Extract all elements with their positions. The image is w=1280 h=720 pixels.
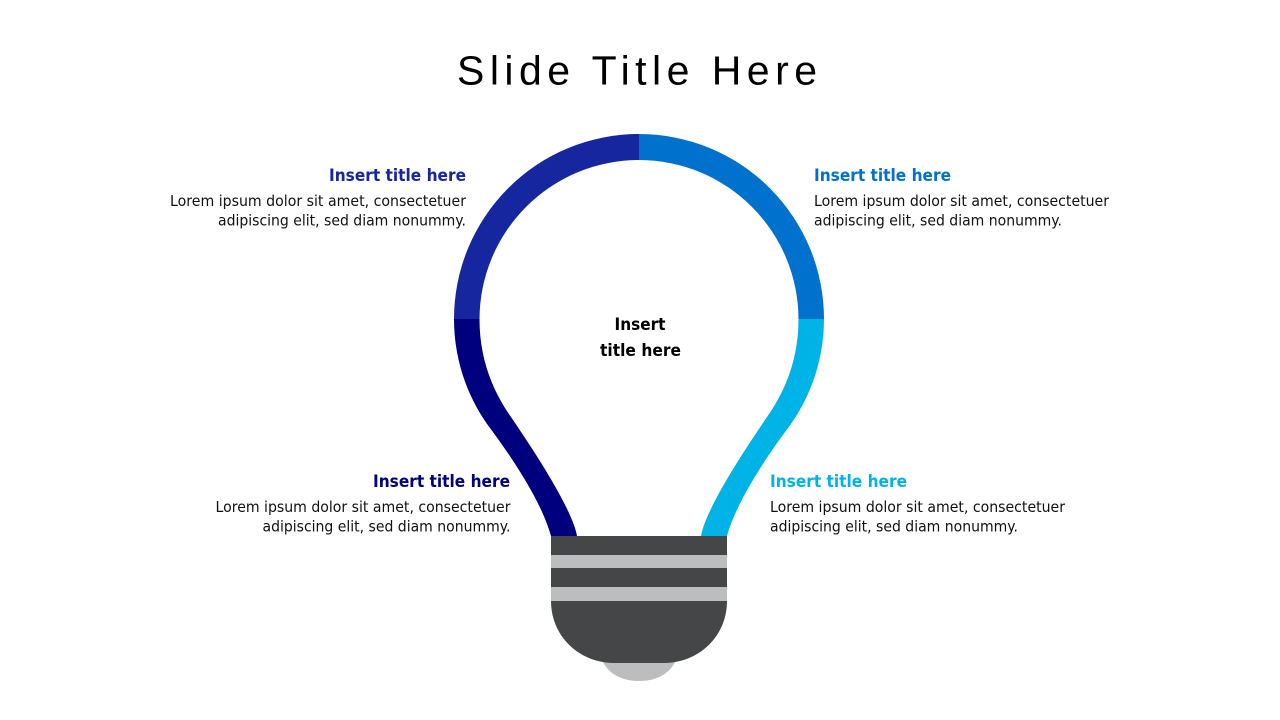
title: Slide Title Here (457, 48, 817, 94)
bulb segment: bottom right (701, 319, 824, 536)
center title: title here (600, 341, 681, 360)
text block: top left: Lorem ipsum dolor sit amet, consectetuer (170, 192, 467, 210)
bulb base (551, 536, 727, 663)
bulb segment: bottom left (454, 319, 577, 536)
center title (600, 315, 681, 360)
text block: top left: adipiscing elit, sed diam nonummy. (218, 212, 466, 230)
text block: top right: Insert title here (814, 166, 951, 185)
text block: top right: adipiscing elit, sed diam nonummy. (814, 212, 1062, 230)
text block: bottom left: adipiscing elit, sed diam nonummy. (262, 518, 510, 536)
text block: bottom right: adipiscing elit, sed diam nonummy. (770, 518, 1018, 536)
bulb segment: top right (639, 134, 824, 320)
text block: bottom left (216, 472, 511, 536)
center title: Insert (614, 315, 666, 334)
text block: bottom left: Lorem ipsum dolor sit amet, consectetuer (216, 498, 511, 516)
text block: bottom right (770, 472, 1066, 536)
text block: bottom right: Lorem ipsum dolor sit amet, consectetuer (770, 498, 1066, 516)
lightbulb icon (454, 134, 824, 681)
text block: bottom left: Insert title here (373, 472, 510, 491)
base stripe 1 (551, 555, 727, 568)
text block: top left (170, 166, 467, 230)
bulb tip (602, 660, 676, 681)
text block: top left: Insert title here (329, 166, 466, 185)
text block: bottom right: Insert title here (770, 472, 907, 491)
base stripe 2 (551, 587, 727, 601)
bulb segment: top left (454, 134, 639, 320)
text block: top right: Lorem ipsum dolor sit amet, consectetuer (814, 192, 1110, 210)
text block: top right (814, 166, 1110, 230)
